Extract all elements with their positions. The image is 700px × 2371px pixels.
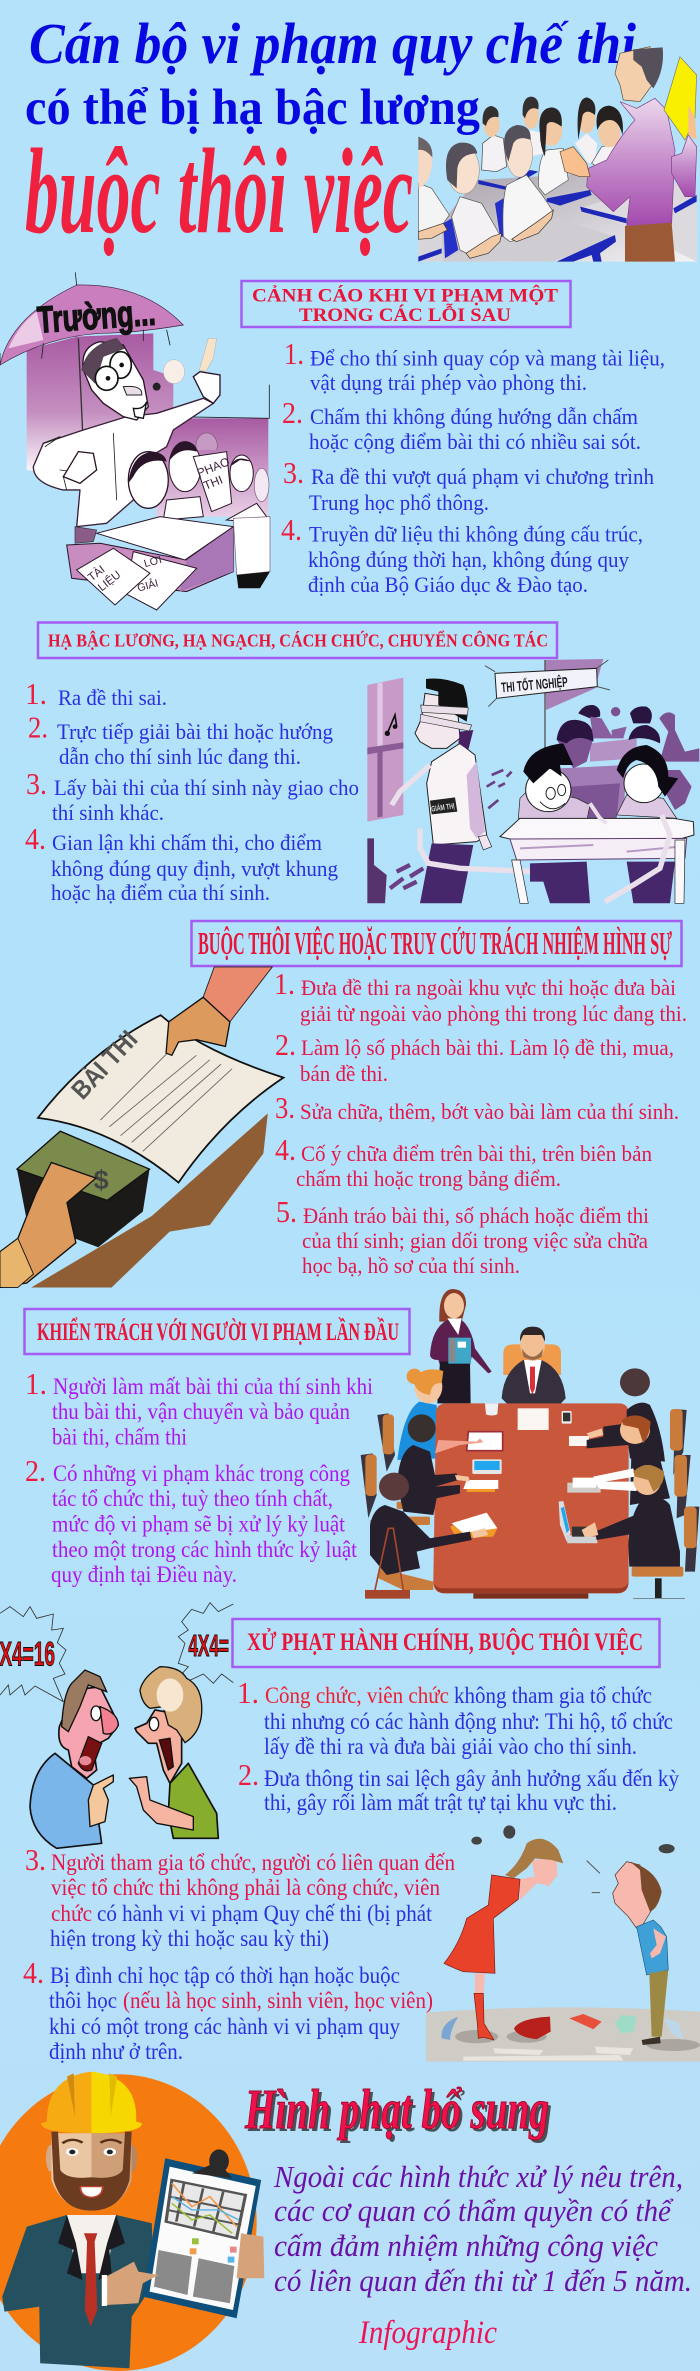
- list: dismissal violations: 3.: [275, 1090, 295, 1125]
- heading box: KHIỂN TRÁCH VỚI NGƯỜI VI PHẠM LẦN ĐẦU: [37, 1317, 399, 1346]
- heading box: [38, 622, 557, 658]
- list: warning violations: [281, 336, 665, 597]
- desk and papers: LỜI: [142, 553, 163, 570]
- list: items 3 and 4: việc tổ chức thi không phải là công chức, viên: [51, 1875, 440, 1900]
- desk and papers: TÀI: [86, 563, 107, 584]
- list: warning violations: 1.: [284, 336, 304, 371]
- illustration: meeting around a table: [361, 1289, 699, 1599]
- blue shirt woman: [397, 1369, 443, 1460]
- list: dismissal violations: Đưa đề thi ra ngoài khu vực thi hoặc đưa bài: [301, 975, 676, 1000]
- table: [433, 1403, 629, 1593]
- list: warning violations: định của Bộ Giáo dục & Đào tạo.: [308, 572, 588, 597]
- standing woman: [430, 1289, 492, 1403]
- title line 2: có thể bị hạ bậc lương: [25, 80, 480, 136]
- illustration: worker with clipboard: [0, 2072, 264, 2371]
- list: warning violations: Chấm thi không đúng hướng dẫn chấm: [310, 404, 638, 429]
- list: items 3 and 4: chức: [51, 1901, 92, 1926]
- illustration: teacher and students in classroom: [418, 47, 697, 262]
- list: items 1 and 2: không tham gia tổ chức: [454, 1683, 652, 1708]
- face: [46, 2132, 137, 2211]
- man in green shirt: [129, 1667, 218, 1838]
- back row students: [482, 97, 623, 195]
- invigilator: [392, 678, 537, 903]
- list: reprimand violations: quy định tại Điều này.: [51, 1562, 237, 1587]
- list: warning violations: Truyền dữ liệu thi không đúng cấu trúc,: [309, 522, 643, 546]
- list: demotion violations: [25, 676, 359, 905]
- hands: [102, 2233, 264, 2306]
- heading box: [232, 1619, 660, 1667]
- heading box: HẠ BẬC LƯƠNG, HẠ NGẠCH, CÁCH CHỨC, CHUYỂN CÔNG TÁC: [48, 630, 548, 650]
- list: items 1 and 2: 1.: [237, 1675, 259, 1710]
- boss: [502, 1327, 566, 1413]
- list: dismissal violations: 2.: [275, 1027, 296, 1062]
- heading box: CẢNH CÁO KHI VI PHẠM MỘT: [252, 284, 558, 306]
- list: warning violations: 4.: [281, 512, 302, 547]
- list: items 1 and 2: Công chức, viên chức: [265, 1683, 449, 1708]
- panel: warning: [242, 281, 665, 597]
- belongings on the ground: [442, 2014, 683, 2040]
- list: warning violations: hoặc cộng điểm bài thi có nhiều sai sót.: [309, 429, 641, 454]
- flies and spit marks: [471, 1825, 675, 1893]
- sign: phao thi: PHAO: [195, 454, 232, 480]
- list: dismissal violations: của thí sinh; gian dối trong việc sửa chữa: [302, 1228, 648, 1253]
- heading: Hình phạt bổ sung: [247, 2082, 552, 2144]
- list: warning violations: 2.: [282, 395, 303, 430]
- paragraph: các cơ quan có thẩm quyền có thể: [274, 2193, 674, 2228]
- list: demotion violations: Gian lận khi chấm thi, cho điểm: [52, 830, 322, 855]
- heading box: TRONG CÁC LỖI SAU: [299, 304, 511, 326]
- list: dismissal violations: 5.: [276, 1194, 297, 1229]
- speech bubble left: [0, 1607, 66, 1702]
- illustration: blindfolded invigilator and cheating students: [367, 659, 699, 903]
- heading box: [24, 1309, 410, 1354]
- list: reprimand violations: Người làm mất bài thi của thí sinh khi: [53, 1374, 373, 1399]
- speech bubble right: [178, 1603, 233, 1683]
- desk and papers: LIỆU: [95, 568, 123, 594]
- list: demotion violations: 2.: [28, 710, 48, 744]
- list: dismissal violations: Đánh tráo bài thi, số phách hoặc điểm thi: [303, 1203, 649, 1228]
- list: items 3 and 4: có hành vi vi phạm Quy chế thi (bị phát: [97, 1901, 433, 1926]
- clipboard: [143, 2149, 261, 2318]
- list: warning violations: 3.: [283, 455, 304, 490]
- list: demotion violations: hoặc hạ điểm của thí sinh.: [51, 880, 270, 905]
- list: items 1 and 2: thi, gây rối làm mất trật tự tại khu vực thi.: [264, 1790, 617, 1815]
- list: demotion violations: Lấy bài thi của thí sinh này giao cho: [54, 775, 359, 800]
- list: items 1 and 2: 2.: [238, 1757, 259, 1792]
- list: demotion violations: không đúng quy định, vượt khung: [51, 856, 338, 881]
- banner: thi tot nghiep: THI TỐT NGHIỆP: [500, 673, 568, 695]
- list: reprimand violations: [25, 1366, 373, 1587]
- paragraph: [273, 2159, 692, 2298]
- list: dismissal violations: 1.: [274, 966, 295, 1001]
- front row students: [418, 125, 553, 258]
- panel: administrative penalty: [23, 1619, 679, 2064]
- speech bubble right: 4X4=: [188, 1629, 229, 1663]
- list: items 3 and 4: [23, 1842, 455, 2064]
- list: dismissal violations: học bạ, hồ sơ của thí sinh.: [302, 1253, 520, 1278]
- list: warning violations: Ra đề thi vượt quá phạm vi chương trình: [311, 464, 654, 489]
- list: warning violations: không đúng thời hạn, không đúng quy: [308, 547, 629, 572]
- illustration: two men arguing: [0, 1603, 233, 1848]
- chairs: [361, 1409, 699, 1598]
- seated people left: [370, 1414, 488, 1575]
- back wall and background students: [545, 659, 603, 710]
- list: warning violations: vật dụng trái phép vào phòng thi.: [310, 370, 587, 395]
- heading box: [242, 281, 570, 327]
- list: items 3 and 4: 3.: [25, 1842, 46, 1877]
- students: [128, 433, 269, 523]
- source credit: Infographic: [358, 2315, 497, 2351]
- heading: Hình phạt bổ sung: [244, 2079, 549, 2141]
- panel: dismissal or criminal prosecution: [192, 921, 687, 1278]
- banner: thi tot nghiep: [485, 660, 610, 707]
- invigilator: GIÁM THỊ: [431, 801, 455, 814]
- hard hat: [41, 2072, 142, 2133]
- list: demotion violations: dẫn cho thí sinh lúc đang thi.: [59, 744, 301, 769]
- paper label: BÀI THI: [66, 1025, 143, 1105]
- list: dismissal violations: 4.: [275, 1132, 296, 1167]
- list: reprimand violations: bài thi, chấm thi: [52, 1424, 187, 1450]
- list: reprimand violations: 1.: [25, 1366, 47, 1401]
- raised hand: [193, 372, 220, 403]
- list: items 3 and 4: Bị đình chỉ học tập có thời hạn hoặc buộc: [50, 1963, 400, 1988]
- panel: demotion: [25, 622, 557, 905]
- illustration: headmaster under umbrella: [0, 273, 270, 610]
- list: dismissal violations: Sửa chữa, thêm, bớt vào bài làm của thí sinh.: [300, 1099, 679, 1124]
- list: items 3 and 4: thôi học: [49, 1988, 117, 2013]
- list: warning violations: Trung học phổ thông.: [309, 490, 489, 515]
- list: items 3 and 4: hiện trong kỳ thi hoặc sau kỳ thi): [50, 1926, 329, 1951]
- list: warning violations: Để cho thí sinh quay cóp và mang tài liệu,: [310, 346, 665, 370]
- desk and papers: [67, 517, 270, 610]
- list: reprimand violations: theo một trong các hình thức kỷ luật: [52, 1537, 358, 1562]
- umbrella label: Trường...: [36, 291, 157, 341]
- umbrella: [0, 285, 183, 365]
- paragraph: cấm đảm nhiệm những công việc: [274, 2228, 658, 2263]
- man body: [33, 398, 213, 527]
- paragraph: Ngoài các hình thức xử lý nêu trên,: [273, 2159, 683, 2194]
- seated people right: [582, 1368, 680, 1567]
- man: [613, 1862, 668, 2045]
- list: demotion violations: 1.: [25, 676, 47, 711]
- list: demotion violations: 4.: [25, 821, 46, 856]
- suit: [2, 2215, 154, 2368]
- list: reprimand violations: 2.: [25, 1453, 46, 1488]
- list: items 3 and 4: Người tham gia tổ chức, người có liên quan đến: [51, 1850, 455, 1875]
- illustration: exam paper exchanged for money: $: [94, 1165, 109, 1195]
- panel: reprimand: [24, 1309, 410, 1587]
- list: reprimand violations: Có những vi phạm khác trong công: [53, 1461, 350, 1486]
- list: items 3 and 4: khi có một trong các hành vi vi phạm quy: [49, 2014, 400, 2039]
- sign: phao thi: [193, 452, 232, 512]
- list: items 3 and 4: định như ở trên.: [49, 2039, 183, 2064]
- list: items 1 and 2: [237, 1675, 679, 1815]
- title: [25, 11, 636, 259]
- list: dismissal violations: [274, 966, 687, 1278]
- panel: additional penalty: [244, 2079, 692, 2351]
- list: demotion violations: 3.: [26, 766, 47, 801]
- man in blue shirt: [30, 1670, 118, 1848]
- list: demotion violations: Trực tiếp giải bài thi hoặc hướng: [57, 719, 333, 744]
- teacher: [560, 47, 697, 262]
- list: dismissal violations: Cố ý chữa điểm trên bài thi, trên biên bản: [301, 1141, 652, 1166]
- list: reprimand violations: mức độ vi phạm sẽ bị xử lý kỷ luật: [52, 1512, 346, 1536]
- list: reprimand violations: thu bài thi, vận chuyển và bảo quản: [52, 1399, 350, 1424]
- title line 1: Cán bộ vi phạm quy chế thi: [29, 11, 636, 76]
- list: items 1 and 2: thi nhưng có các hành động như: Thi hộ, tổ chức: [264, 1709, 673, 1734]
- sign: phao thi: THI: [202, 473, 225, 493]
- list: demotion violations: Ra đề thi sai.: [58, 685, 167, 710]
- list: dismissal violations: Làm lộ số phách bài thi. Làm lộ đề thi, mua,: [301, 1035, 674, 1060]
- list: items 3 and 4: 4.: [23, 1955, 44, 1990]
- speech bubble left: X4=16: [0, 1636, 55, 1674]
- cheating students at desk: [500, 743, 694, 903]
- list: dismissal violations: chấm thi hoặc trong bảng điểm.: [296, 1166, 561, 1191]
- man head: [83, 342, 148, 420]
- illustration: couple shouting: [426, 1825, 700, 2062]
- illustration: exam paper exchanged for money: [0, 967, 283, 1287]
- list: items 1 and 2: lấy đề thi ra và đưa bài giải vào cho thí sinh.: [264, 1734, 637, 1759]
- list: dismissal violations: giải từ ngoài vào phòng thi trong lúc đang thi.: [300, 1001, 687, 1026]
- list: items 3 and 4: (nếu là học sinh, sinh viên, học viên): [123, 1988, 433, 2013]
- list: dismissal violations: bán đề thi.: [300, 1061, 388, 1086]
- list: demotion violations: thí sinh khác.: [52, 800, 164, 825]
- list: reprimand violations: tác tổ chức thi, tuỳ theo tính chất,: [52, 1486, 333, 1511]
- heading: [244, 2079, 552, 2144]
- desk and papers: GIẢI: [136, 576, 160, 595]
- woman: [444, 1839, 563, 2040]
